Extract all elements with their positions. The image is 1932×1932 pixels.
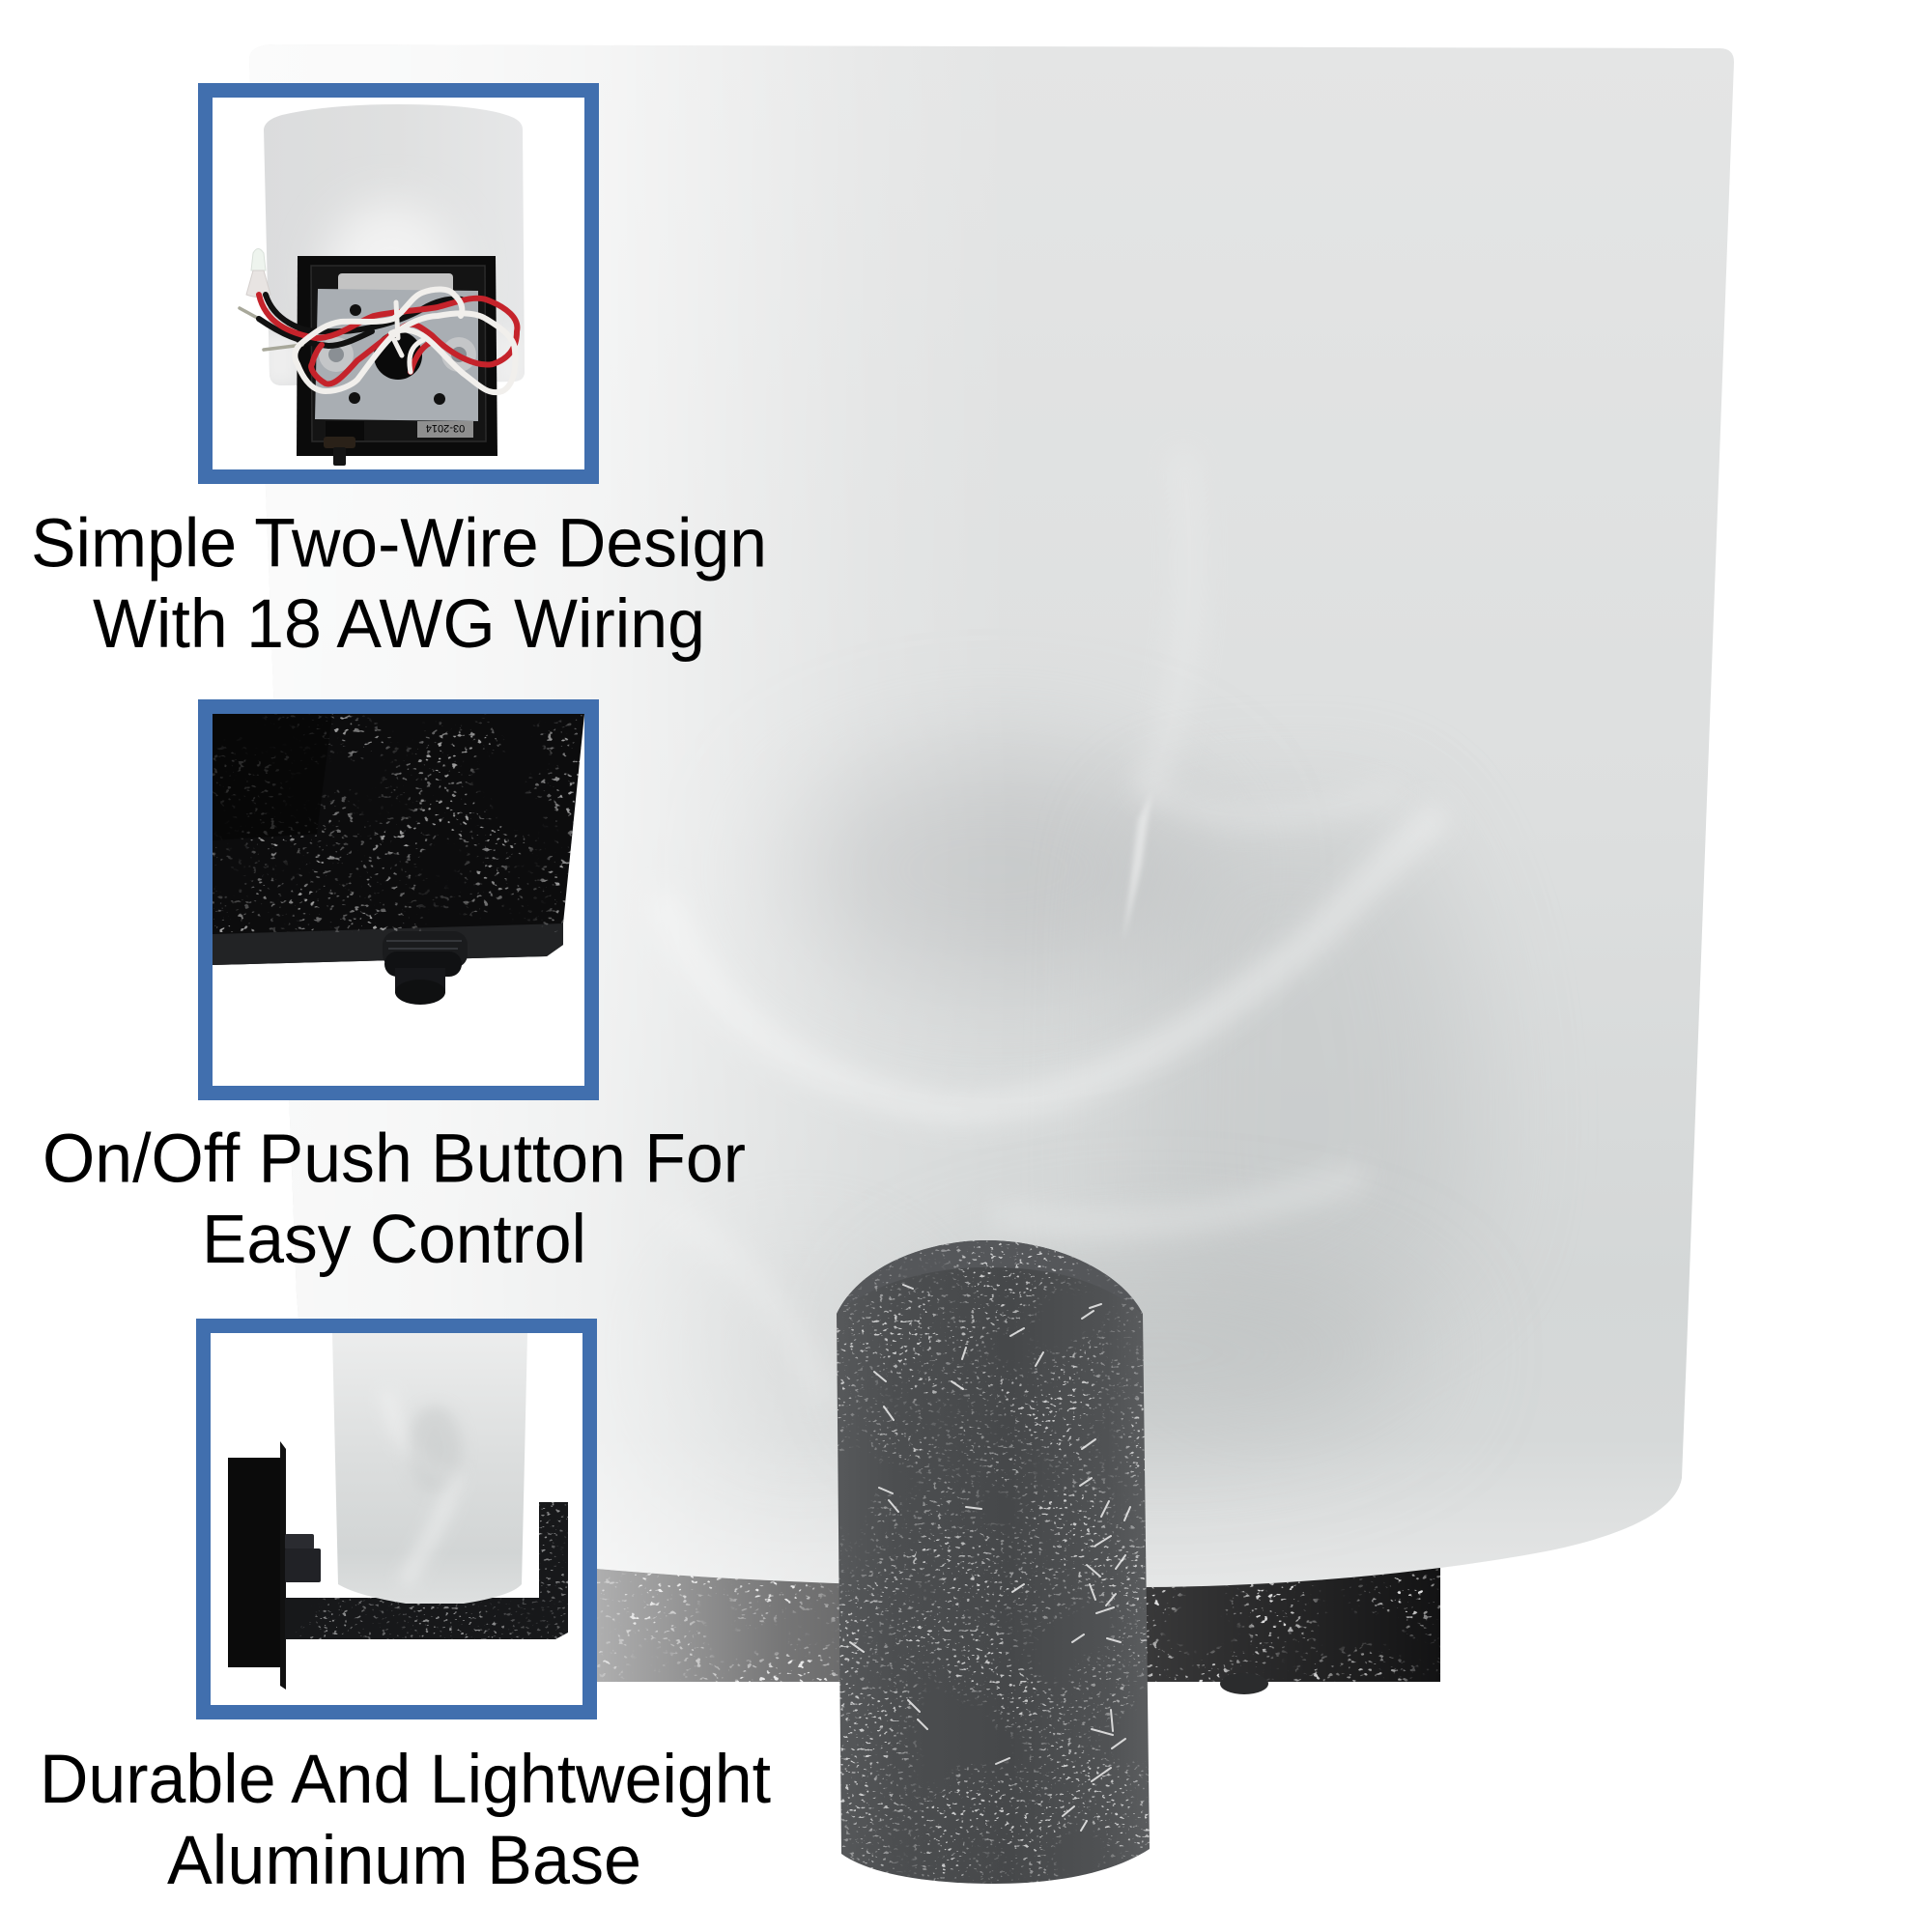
inset photo: button closeup [213,714,584,1005]
inset photo: wiring: 03-2014 [426,422,465,434]
caption: aluminum base: Durable And Lightweight [40,1742,771,1818]
caption: push button: On/Off Push Button For [43,1121,746,1198]
light swirl lines [666,464,1434,1391]
panel: push button [205,707,591,1094]
caption: push button [43,1121,746,1278]
large frosted glass shade [232,39,1748,1594]
aluminum post foreground [831,1236,1155,1889]
inset frame [205,91,591,477]
caption: two-wire design: With 18 AWG Wiring [93,586,705,663]
caption: aluminum base [40,1742,771,1899]
caption: push button: Easy Control [202,1202,586,1278]
inset photo: wiring [240,101,527,466]
inset photo: side view [228,1333,568,1690]
bracket bar behind glass [597,1536,1440,1682]
caption: two-wire design [31,506,767,663]
caption: two-wire design: Simple Two-Wire Design [31,506,767,582]
push button under bar [1220,1673,1268,1694]
inset frame [205,707,591,1094]
panel: aluminum base [203,1325,589,1712]
caption: aluminum base: Aluminum Base [167,1823,641,1899]
bright metal flecks [850,1285,1130,1831]
inset frame [203,1325,589,1712]
panel: two-wire design [205,91,591,477]
